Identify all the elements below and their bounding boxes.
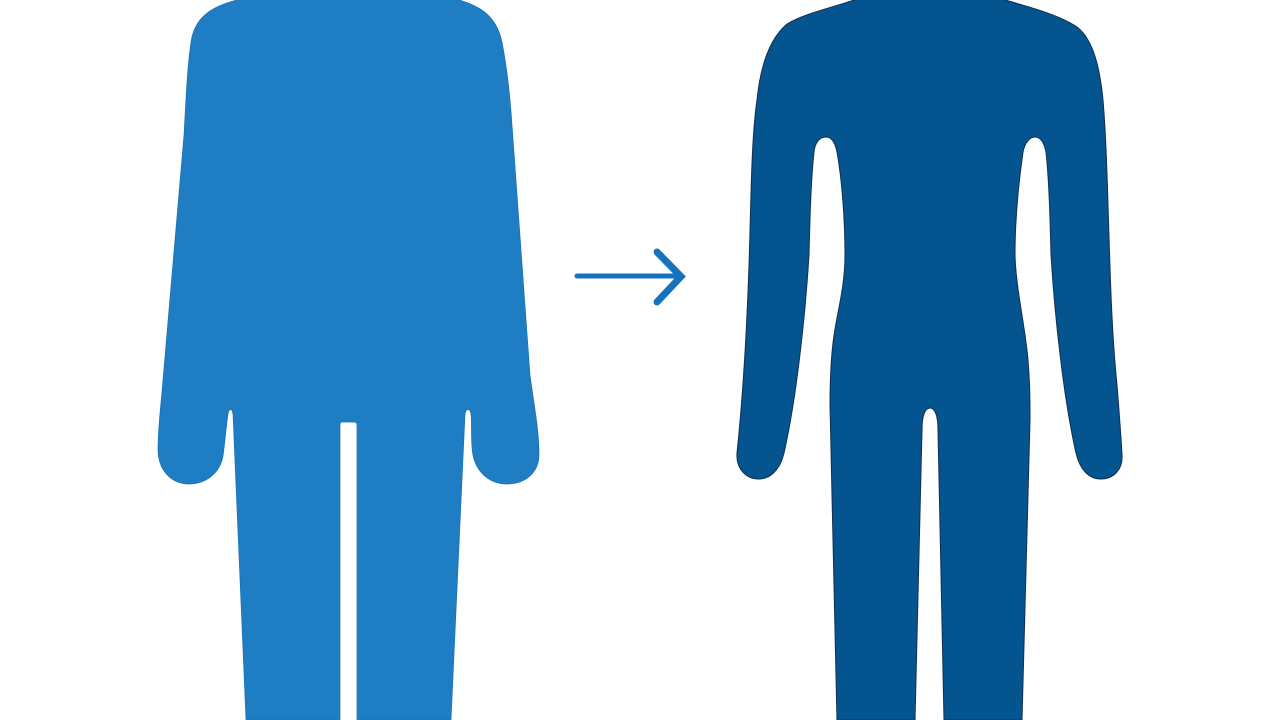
icon: blocky light blue figure xyxy=(158,0,539,720)
arrow: transformation arrow xyxy=(577,252,681,302)
icon: slim dark blue human figure xyxy=(737,0,1122,720)
